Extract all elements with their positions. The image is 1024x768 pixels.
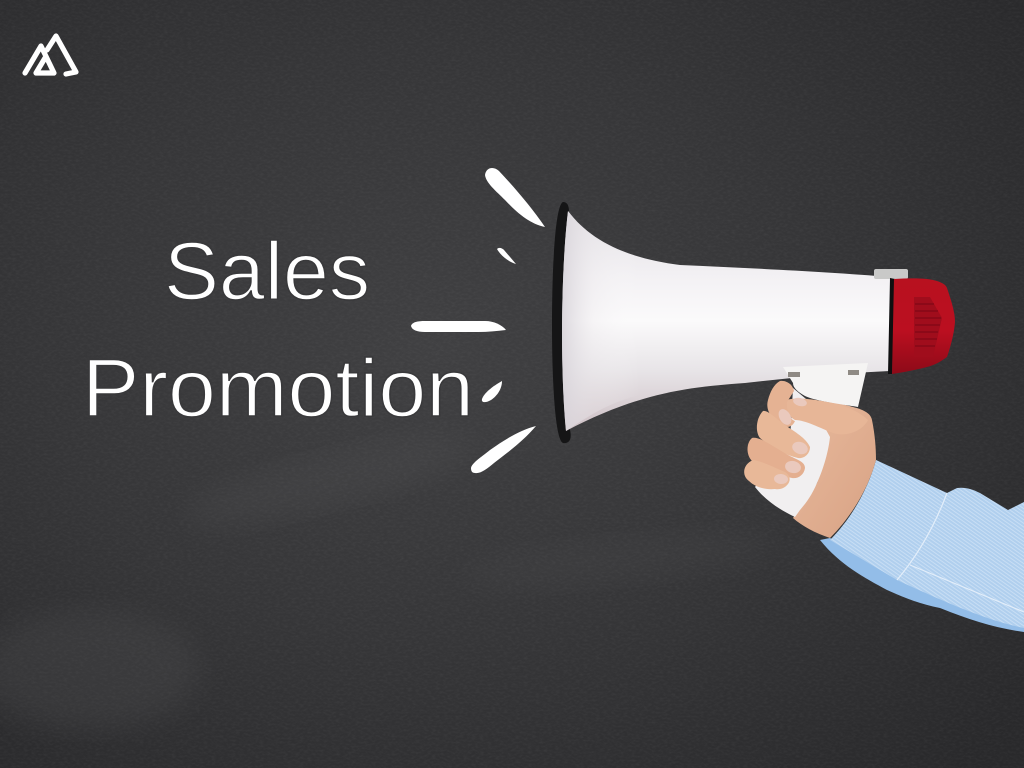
fingernails [774, 396, 810, 485]
hand gripping handle [744, 363, 876, 538]
third finger [748, 438, 805, 478]
arm in blue shirt [820, 460, 1024, 632]
title: Sales Promotion: Sales [164, 226, 370, 317]
red speaker cap [892, 278, 955, 374]
little finger [744, 460, 790, 489]
red speaker vents [914, 297, 942, 357]
palm [787, 399, 876, 538]
handle [755, 388, 830, 517]
megaphone rim [552, 202, 571, 443]
bracket screws [788, 370, 859, 377]
horn shading [562, 211, 640, 431]
logo icon [25, 36, 76, 74]
thumb [786, 399, 868, 434]
sound burst lines [411, 168, 545, 473]
index finger [767, 381, 795, 427]
cuff fold seam [897, 493, 1024, 612]
megaphone horn and tube [562, 211, 891, 431]
shirt underside [820, 538, 1024, 632]
shirt cuff [830, 460, 947, 580]
second finger [757, 411, 810, 458]
title: Sales Promotion: Promotion [82, 343, 474, 434]
black ring [888, 278, 895, 374]
mount bracket [783, 363, 868, 407]
clear clip on top [874, 269, 908, 279]
title: Sales Promotion [82, 226, 474, 434]
shirt sleeve [897, 488, 1024, 628]
megaphone [552, 202, 955, 443]
